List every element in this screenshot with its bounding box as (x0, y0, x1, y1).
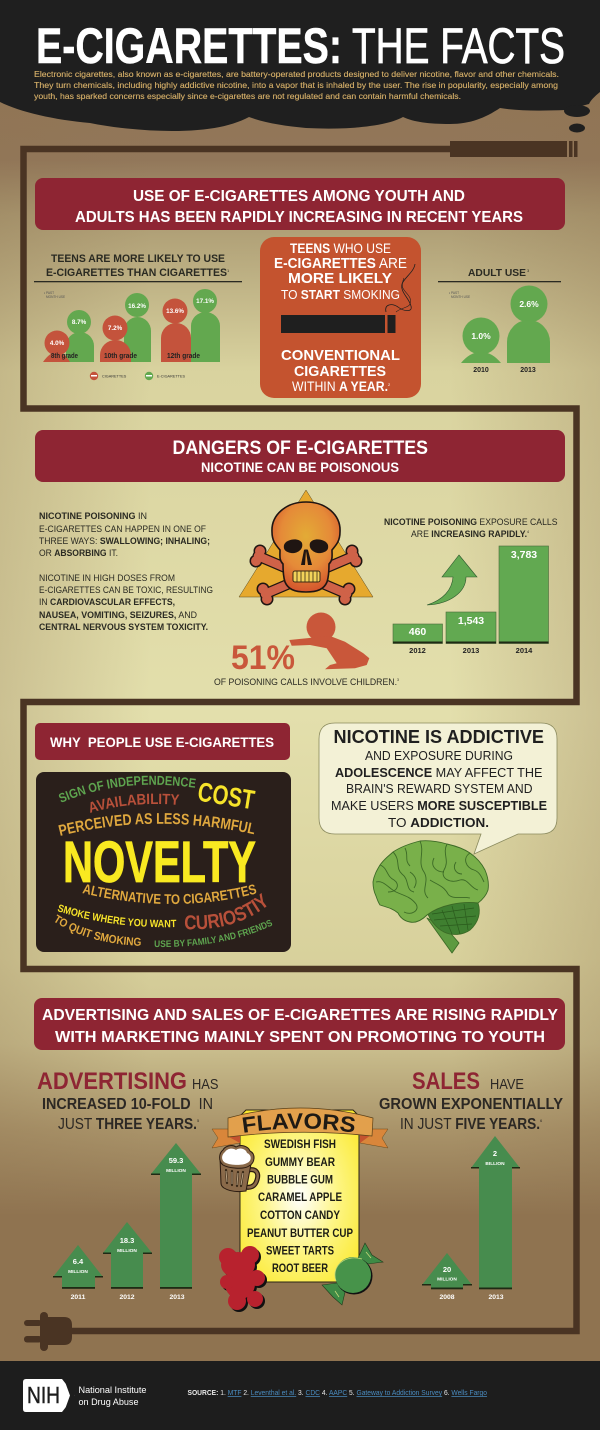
bar chart: exposure calls (393, 546, 548, 655)
arrow: rising calls (427, 555, 477, 605)
pictogram chart: adult use: ▪ PAST (449, 291, 459, 295)
icon: gummy bear (219, 1246, 267, 1312)
teens chart heading: TEENS ARE MORE LIKELY TO USE (51, 253, 225, 265)
logo: NIH: on Drug Abuse (78, 1397, 138, 1407)
flavor names (247, 1137, 353, 1275)
teens chart heading (34, 253, 242, 282)
icon: brain (373, 841, 488, 953)
word cloud: PERCEIVED AS LESS HARMFUL (58, 813, 254, 836)
text: advertising has increased: JUST THREE YEARS. (58, 1116, 197, 1133)
text: nicotine poisoning explanation: E-CIGARETTES CAN BE TOXIC, RESULTING (39, 585, 213, 595)
text: nicotine poisoning explanation: NAUSEA, VOMITING, SEIZURES, AND (39, 610, 197, 620)
ribbon with title: FLAVORS (242, 1113, 355, 1133)
smoke cloud header (0, 0, 600, 132)
heading banner: WITH MARKETING MAINLY SPENT ON PROMOTING TO YOUTH (55, 1029, 545, 1046)
pictogram chart: teen use by grade: ▪ PAST (44, 291, 54, 295)
panel: section 4 advertising and sales (34, 998, 565, 1312)
source list: SOURCE: 1. MTF 2. Leventhal et al. 3. CDC 4. AAPC 5. Gateway to Addiction Survey 6. Wells Fargo (188, 1388, 487, 1397)
text: nicotine poisoning explanation: NICOTINE POISONING IN (39, 511, 147, 521)
callout: teens more likely to smoke: WITHIN A YEAR. (292, 379, 388, 394)
callout: teens more likely to smoke: 2 (388, 382, 391, 387)
text: nicotine poisoning explanation: IN CARDIOVASCULAR EFFECTS, (39, 597, 175, 607)
text: nicotine poisoning explanation: OR ABSORBING IT. (39, 548, 118, 558)
word cloud: NOVELTY (63, 830, 256, 895)
text: nicotine poisoning explanation: NICOTINE IN HIGH DOSES FROM (39, 573, 175, 583)
connector cord (24, 149, 576, 1331)
bar chart: exposure calls: 3,783 (511, 549, 537, 561)
word cloud (36, 772, 291, 952)
text: advertising has increased: ADVERTISING (37, 1068, 187, 1095)
flavor names: GUMMY BEAR (265, 1155, 335, 1169)
flavor names: SWEET TARTS (266, 1244, 334, 1258)
icon: skull and crossbones on warning triangle (239, 490, 373, 606)
icon: wrapped candy (322, 1243, 383, 1305)
callout: teens more likely to smoke: CONVENTIONAL (281, 347, 400, 364)
stat: 51 percent: 51% (231, 639, 295, 677)
heading banner (34, 998, 565, 1050)
icon: cigarette with smoke (281, 264, 415, 333)
pictogram chart: adult use: 2010 (473, 367, 489, 374)
text: sales have grown: HAVE (490, 1077, 524, 1093)
pictogram chart: teen use by grade: MONTH USE (46, 295, 65, 299)
pictogram chart: teen use by grade: 13.6% (166, 308, 184, 315)
callout: nicotine is addictive speech bubble: ADOLESCENCE MAY AFFECT THE (335, 765, 543, 780)
callout: teens more likely to smoke: CIGARETTES (294, 363, 386, 380)
icon: plug at cord end (24, 1312, 72, 1351)
callout: teens more likely to smoke: E-CIGARETTES ARE (274, 256, 407, 272)
word cloud: SMOKE WHERE YOU WANT (58, 904, 176, 928)
text: nicotine poisoning explanation: CENTRAL NERVOUS SYSTEM TOXICITY. (39, 622, 208, 632)
word cloud: ALTERNATIVE TO CIGARETTES (82, 884, 256, 904)
chart heading: exposure calls: ARE INCREASING RAPIDLY. (411, 529, 527, 540)
arrow chart: sales: MILLION (437, 1276, 457, 1282)
pictogram chart: teen use by grade: 10th grade (104, 353, 137, 360)
icon: crawling baby (289, 612, 369, 669)
footer (0, 1361, 600, 1430)
heading banner (35, 723, 290, 760)
pictogram chart: adult use: MONTH USE (451, 295, 470, 299)
legend (90, 372, 186, 380)
panel: section 3 why people use (35, 722, 558, 954)
heading banner: ADVERTISING AND SALES OF E-CIGARETTES ARE RISING RAPIDLY (42, 1007, 559, 1024)
word cloud: USE BY FAMILY AND FRIENDS (154, 920, 272, 948)
callout: nicotine is addictive speech bubble: AND EXPOSURE DURING (365, 748, 513, 763)
arrow chart: sales: 20 (443, 1265, 451, 1274)
teens chart heading: E-CIGARETTES THAN CIGARETTES (46, 267, 227, 279)
heading banner: NICOTINE CAN BE POISONOUS (201, 459, 399, 475)
arrow chart: sales: 2013 (488, 1294, 504, 1301)
arrow chart: sales: 2 (493, 1149, 497, 1158)
word cloud: CURIOSTIY (184, 893, 266, 930)
text: sales have grown: GROWN EXPONENTIALLY (379, 1096, 564, 1113)
flavor names: CARAMEL APPLE (258, 1190, 342, 1204)
heading banner (35, 430, 565, 482)
pictogram chart: adult use: 2013 (520, 367, 536, 374)
stat: 51 percent (214, 639, 399, 688)
pictogram chart: teen use by grade (43, 289, 220, 362)
text: advertising has increased: HAS (192, 1077, 218, 1093)
adult use heading: ADULT USE (468, 267, 526, 279)
arrow chart: advertising spend: 59.3 (169, 1156, 183, 1165)
arrow chart: sales: BILLION (485, 1161, 505, 1167)
chart heading: exposure calls (384, 517, 558, 540)
pictogram chart: teen use by grade: 8th grade (51, 353, 78, 360)
arrow chart: advertising spend: 2011 (71, 1294, 86, 1301)
legend: CIGARETTES (102, 374, 127, 378)
callout: nicotine is addictive speech bubble: MAKE USERS MORE SUSCEPTIBLE (331, 798, 547, 813)
intro text: Electronic cigarettes, also known as e-cigarettes, are battery-operated products designed to deliver nicotine, flavor and other chemicals. (34, 69, 559, 79)
pictogram chart: teen use by grade: 7.2% (108, 325, 123, 332)
callout: teens more likely to smoke: TEENS WHO USE (290, 240, 391, 256)
heading banner: DANGERS OF E-CIGARETTES (172, 438, 428, 459)
callout: nicotine is addictive speech bubble: NICOTINE IS ADDICTIVE (334, 727, 544, 747)
flavor names: COTTON CANDY (260, 1208, 340, 1222)
intro text (34, 69, 559, 101)
flavor names: ROOT BEER (272, 1261, 328, 1275)
word cloud: SIGN OF INDEPENDENCE (58, 776, 196, 802)
text: sales have grown: IN JUST FIVE YEARS. (400, 1116, 540, 1133)
heading banner: ADULTS HAS BEEN RAPIDLY INCREASING IN RECENT YEARS (75, 209, 523, 226)
adult use heading: 3 (527, 268, 530, 273)
pictogram chart: adult use: 2.6% (519, 299, 539, 309)
bar chart: exposure calls: 2014 (516, 646, 533, 655)
arrow chart: advertising spend: MILLION (68, 1269, 88, 1275)
text: advertising has increased (37, 1068, 218, 1133)
title: E-CIGARETTES: (36, 18, 342, 74)
logo: NIH: NIH (27, 1382, 60, 1408)
teens chart heading: 1 (227, 268, 230, 273)
bar chart: exposure calls: 2013 (463, 646, 479, 655)
heading banner: USE OF E-CIGARETTES AMONG YOUTH AND (133, 188, 465, 205)
flavor names: BUBBLE GUM (267, 1172, 333, 1186)
stat: 51 percent: 3 (397, 678, 399, 682)
arrow chart: sales: 2008 (439, 1294, 455, 1301)
text: nicotine poisoning explanation: THREE WAYS: SWALLOWING; INHALING; (39, 536, 210, 546)
ribbon with title (212, 1108, 388, 1148)
arrow chart: advertising spend: 2012 (119, 1294, 135, 1301)
callout: teens more likely to smoke: TO START SMOKING (281, 287, 400, 302)
callout: nicotine is addictive speech bubble: BRAIN'S REWARD SYSTEM AND (346, 781, 532, 796)
flavor names: SWEDISH FISH (264, 1137, 336, 1151)
arrow chart: advertising spend: 2013 (169, 1294, 185, 1301)
pictogram chart: teen use by grade: 16.2% (128, 303, 146, 310)
text: nicotine poisoning explanation: E-CIGARETTES CAN HAPPEN IN ONE OF (39, 524, 206, 534)
callout: teens more likely to smoke: MORE LIKELY (288, 270, 392, 287)
heading banner: WHY PEOPLE USE E-CIGARETTES (50, 735, 274, 750)
pictogram chart: adult use (449, 286, 550, 374)
word cloud: TO QUIT SMOKING (55, 914, 141, 946)
callout: teens more likely to smoke (260, 237, 421, 398)
arrow chart: advertising spend: 18.3 (120, 1236, 134, 1245)
panel: section 2 dangers (35, 430, 565, 688)
text: sales have grown (379, 1068, 564, 1133)
intro text: youth, has sparked concerns especially since e-cigarettes are not regulated and can contain harmful chemicals. (34, 91, 461, 101)
stat: 51 percent: OF POISONING CALLS INVOLVE CHILDREN. (214, 677, 397, 688)
text: sales have grown: SALES (412, 1068, 480, 1095)
text: sales have grown: 6 (540, 1118, 543, 1123)
pictogram chart: teen use by grade: 4.0% (50, 340, 65, 347)
icon: e-cigarette on cord (450, 141, 578, 157)
icon: root beer mug (220, 1146, 258, 1192)
text: nicotine poisoning explanation (39, 511, 213, 632)
callout: nicotine is addictive speech bubble (319, 723, 557, 854)
legend: E-CIGARETTES (157, 374, 186, 378)
chart heading: exposure calls: 4 (527, 530, 529, 534)
adult use heading (438, 267, 561, 282)
text: advertising has increased: INCREASED 10-FOLD IN (42, 1096, 213, 1113)
bar chart: exposure calls: 1,543 (458, 615, 484, 627)
pictogram chart: teen use by grade: 8.7% (72, 319, 87, 326)
text: advertising has increased: 5 (197, 1118, 200, 1123)
arrow chart: advertising spend: 6.4 (73, 1257, 84, 1266)
chart heading: exposure calls: NICOTINE POISONING EXPOSURE CALLS (384, 517, 558, 528)
heading banner (35, 178, 565, 230)
pictogram chart: teen use by grade: 17.1% (196, 298, 214, 305)
arrow chart: advertising spend (53, 1143, 201, 1301)
pictogram chart: teen use by grade: 12th grade (167, 353, 200, 360)
intro text: They turn chemicals, including highly addictive nicotine, into a vapor that is inhaled by the user. The rise in popularity, especially among (34, 80, 558, 90)
word cloud: AVAILABILITY (90, 794, 180, 813)
arrow chart: advertising spend: MILLION (117, 1248, 137, 1254)
pictogram chart: adult use: 1.0% (471, 331, 491, 341)
callout: nicotine is addictive speech bubble: TO ADDICTION. (388, 815, 489, 830)
bar chart: exposure calls: 2012 (409, 646, 426, 655)
arrow chart: advertising spend: MILLION (166, 1168, 186, 1174)
arrow chart: sales (422, 1136, 520, 1301)
logo: NIH: National Institute (78, 1385, 146, 1395)
panel: section 1 use among youth and adults (34, 178, 565, 398)
bar chart: exposure calls: 460 (409, 626, 426, 638)
flavor names: PEANUT BUTTER CUP (247, 1226, 353, 1240)
panel: flavors list (212, 1108, 388, 1282)
logo: NIH (23, 1379, 146, 1412)
word cloud: COST (196, 777, 257, 815)
